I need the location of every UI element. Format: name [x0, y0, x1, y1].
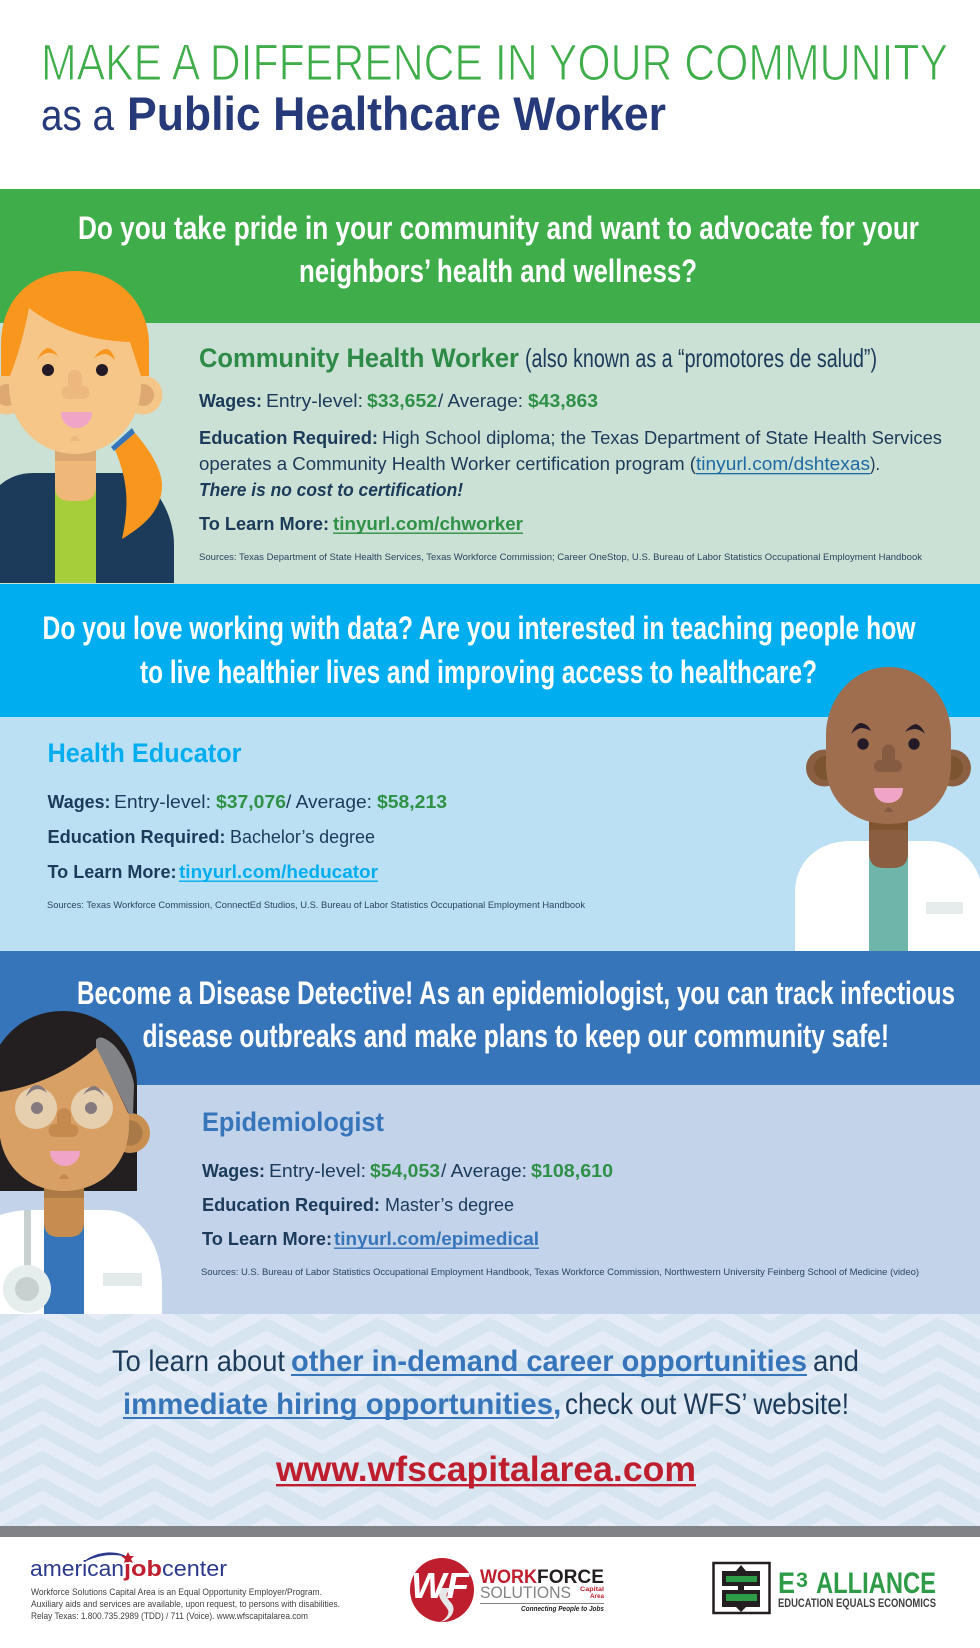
education: community health worker	[199, 428, 942, 500]
call to action: line two: immediate hiring opportunities	[123, 1388, 553, 1421]
title: Public Healthcare Worker	[127, 87, 666, 140]
call to action: line two: ,	[553, 1388, 561, 1421]
education: health educator: Education Required:	[48, 827, 226, 847]
logo: workforce solutions: Connecting People to Jobs	[521, 1606, 604, 1613]
logo: workforce solutions: FORCE	[537, 1567, 604, 1588]
wages: community health worker: Entry-level:	[266, 391, 363, 411]
sources: community health worker: Sources: Texas Department of State Health Services, Texas Workforce Commission; Career OneStop, U.S. Bureau of Labor Statistics Occupational Employment Handbook	[199, 552, 922, 563]
job title: community health worker: Community Health Worker	[199, 343, 519, 373]
wages: community health worker	[199, 391, 598, 411]
wages: community health worker: $43,863	[528, 391, 598, 411]
call to action: line one: and	[813, 1345, 859, 1378]
logo: e3 alliance	[714, 1563, 936, 1613]
logo: workforce solutions: WF	[411, 1565, 470, 1606]
sources: epidemiologist: Sources: U.S. Bureau of Labor Statistics Occupational Employment Handbook, Texas Workforce Commission, Northwestern University Feinberg School of Medicine (video)	[201, 1267, 919, 1278]
question banner: health educator	[0, 584, 980, 718]
wages: health educator: Wages:	[48, 792, 110, 812]
wages: epidemiologist: Entry-level:	[269, 1161, 366, 1181]
call to action: line one: To learn about	[112, 1345, 286, 1378]
logo: american job center	[30, 1552, 227, 1581]
equal opportunity statement: Auxiliary aids and services are available, upon request, to persons with disabilities.	[31, 1599, 340, 1610]
education: community health worker: ).	[870, 454, 880, 474]
learn more: epidemiologist: To Learn More:	[202, 1229, 332, 1249]
call to action: line two: check out WFS’ website!	[565, 1388, 849, 1421]
panel: call to action	[0, 1314, 980, 1526]
character: woman with glasses and stethoscope	[0, 1011, 162, 1315]
logo: american job center: center	[162, 1556, 227, 1581]
logo: workforce solutions	[410, 1558, 604, 1622]
education: health educator	[48, 827, 375, 847]
character: man in white coat	[795, 667, 980, 952]
equal opportunity statement: Workforce Solutions Capital Area is an Equal Opportunity Employer/Program.	[31, 1587, 322, 1598]
panel: epidemiologist	[0, 951, 980, 1315]
education: epidemiologist: Master’s degree	[385, 1195, 514, 1215]
title	[41, 34, 948, 140]
learn more: health educator: tinyurl.com/heducator	[179, 862, 378, 882]
logo: e3 alliance: E	[778, 1567, 795, 1600]
learn more: community health worker: To Learn More:	[199, 514, 329, 534]
logo: workforce solutions: WORK	[480, 1567, 537, 1588]
chevron background	[0, 1314, 980, 1526]
job title: health educator: Health Educator	[48, 738, 242, 768]
logo: american job center: american	[30, 1556, 124, 1581]
wages: health educator	[48, 792, 447, 812]
education: community health worker: High School diploma; the Texas Department of State Health Services	[382, 428, 942, 448]
character: woman with orange ponytail	[0, 271, 174, 583]
panel: health educator	[0, 584, 980, 952]
panel background: health educator	[0, 717, 980, 952]
panel background: community	[0, 323, 980, 584]
learn more: health educator	[48, 862, 378, 882]
call to action: line one: other in-demand career opportunities	[291, 1345, 807, 1378]
logo: workforce solutions: Area	[590, 1593, 604, 1600]
wages: epidemiologist: $54,053	[370, 1161, 440, 1181]
education: community health worker: tinyurl.com/dshtexas	[696, 454, 870, 474]
call to action: line two	[123, 1388, 849, 1421]
learn more: community health worker	[199, 514, 523, 534]
education: epidemiologist: Education Required:	[202, 1195, 380, 1215]
equal opportunity statement	[31, 1587, 340, 1622]
website link: www.wfscapitalarea.com	[275, 1450, 696, 1489]
wages: health educator: $37,076	[216, 792, 286, 812]
wages: community health worker: Wages:	[199, 391, 262, 411]
job title: epidemiologist: Epidemiologist	[202, 1107, 384, 1137]
wages: health educator: Entry-level:	[114, 792, 211, 812]
question banner: community: neighbors’ health and wellness?	[299, 253, 697, 289]
footer divider bar	[0, 1526, 980, 1537]
panel background: epidemiologist	[0, 1085, 980, 1315]
wages: health educator: $58,213	[377, 792, 447, 812]
sources: health educator: Sources: Texas Workforce Commission, ConnectEd Studios, U.S. Bureau of Labor Statistics Occupational Employment Handbook	[47, 900, 585, 911]
learn more: community health worker: tinyurl.com/chworker	[333, 514, 523, 534]
education: community health worker: There is no cost to certification!	[199, 480, 463, 500]
wages: epidemiologist: / Average:	[441, 1161, 527, 1181]
wages: epidemiologist: Wages:	[202, 1161, 265, 1181]
wages: epidemiologist	[202, 1161, 613, 1181]
learn more: epidemiologist	[202, 1229, 539, 1249]
wages: health educator: / Average:	[286, 792, 372, 812]
education: community health worker: operates a Community Health Worker certification program (	[199, 454, 696, 474]
title: as a	[41, 91, 114, 140]
education: epidemiologist	[202, 1195, 514, 1215]
wages: community health worker: $33,652	[367, 391, 437, 411]
question banner: epidemiologist	[0, 951, 980, 1085]
logo: workforce solutions: SOLUTIONS	[480, 1583, 571, 1602]
learn more: epidemiologist: tinyurl.com/epimedical	[334, 1229, 539, 1249]
job title: community health worker: (also known as a “promotores de salud”)	[525, 343, 877, 373]
education: community health worker: Education Required:	[199, 428, 378, 448]
logo: e3 alliance: ALLIANCE	[816, 1567, 936, 1600]
panel: community health worker	[0, 189, 980, 584]
logo: e3 alliance: EDUCATION EQUALS ECONOMICS	[778, 1596, 936, 1610]
education: health educator: Bachelor’s degree	[230, 827, 375, 847]
wages: community health worker: / Average:	[438, 391, 523, 411]
equal opportunity statement: Relay Texas: 1.800.735.2989 (TDD) / 711 (Voice). www.wfscapitalarea.com	[31, 1611, 308, 1622]
question banner: community	[0, 189, 980, 323]
job title: community health worker	[199, 343, 877, 373]
logo: workforce solutions: Capital	[580, 1586, 604, 1593]
learn more: health educator: To Learn More:	[48, 862, 176, 882]
wages: epidemiologist: $108,610	[531, 1161, 613, 1181]
logo: e3 alliance: 3	[796, 1569, 808, 1592]
logo: american job center: job	[123, 1556, 162, 1581]
